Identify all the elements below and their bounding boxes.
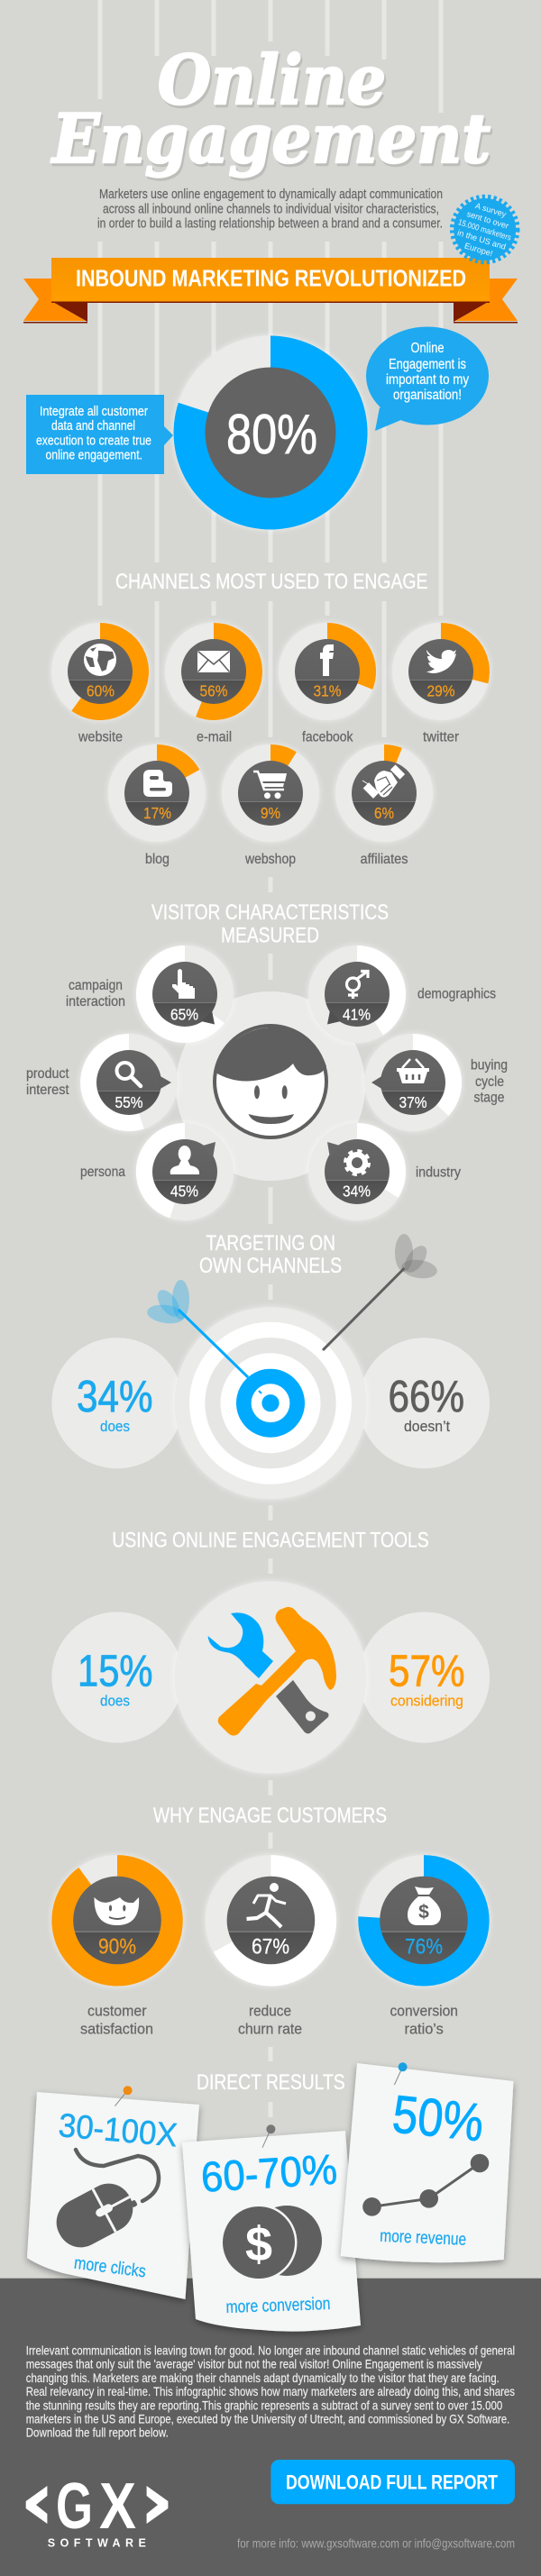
satellite: campaign interaction 65%: interaction: [66, 994, 125, 1009]
donut: reduce churn rate 67%: reduce: [249, 2003, 291, 2020]
stat: 66% doesn't: doesn’t: [404, 1419, 450, 1435]
icon: envelope: [197, 651, 230, 672]
heading: visitor characteristics: VISITOR CHARACTERISTICS: [151, 900, 389, 925]
note: 60-70% more conversion: [182, 2124, 361, 2332]
donut: customer satisfaction 90%: customer: [87, 2003, 147, 2020]
satellite: persona 45%: persona: [80, 1165, 125, 1180]
icon: runner: [247, 1883, 286, 1927]
heading: visitor characteristics: [151, 900, 389, 948]
chart: revenue line: [362, 2154, 489, 2216]
icon: face: [94, 1897, 139, 1925]
stat: 34% does: does: [100, 1419, 130, 1435]
survey starburst badge: sent to over: [465, 209, 509, 231]
channel: twitter 29%: 29%: [427, 682, 455, 700]
satellite: buying cycle stage 37%: [364, 1034, 508, 1131]
icon: basket: [397, 1059, 429, 1083]
satellite: product interest 55%: interest: [26, 1082, 69, 1098]
dart: grey: [323, 1234, 438, 1350]
satellite: industry 34%: [308, 1123, 461, 1220]
icon: money bag: $: [418, 1902, 429, 1923]
intro paragraph: in order to build a lasting relationship between a brand and a consumer.: [97, 216, 443, 231]
donut: customer satisfaction 90%: [51, 1855, 183, 2038]
channel: website 60%: [51, 623, 149, 745]
icon: wrench: [207, 1612, 273, 1678]
download button: [270, 2460, 515, 2504]
satellite: campaign interaction 65%: 65%: [170, 1006, 198, 1024]
stat: 66% doesn't: [359, 1338, 490, 1468]
channel: affiliates 6%: 6%: [374, 804, 394, 822]
icon: money bag: [408, 1886, 441, 1925]
heading: channels: CHANNELS MOST USED TO ENGAGE: [115, 570, 427, 594]
channel: blog 17%: blog: [145, 852, 170, 867]
stat: 57% considering: [359, 1612, 490, 1743]
donut: conversion ratios 76%: conversion: [390, 2003, 458, 2020]
icon: hammer: [218, 1607, 336, 1736]
stat: 34% does: [51, 1338, 183, 1468]
donut chart: 80%: [173, 335, 368, 530]
satellite: buying cycle stage 37%: stage: [474, 1091, 505, 1106]
channel: facebook 31%: 31%: [314, 682, 342, 700]
channel: blog 17%: 17%: [143, 804, 171, 822]
stat: 34% does: 34%: [77, 1373, 153, 1421]
donut: conversion ratios 76%: [358, 1855, 490, 2038]
satellite: industry 34%: industry: [416, 1165, 461, 1181]
survey starburst badge: in the US and: [456, 228, 507, 251]
note: 50% more revenue: 50%: [390, 2084, 487, 2152]
title: Engagement: [50, 99, 491, 178]
channel: webshop 9%: webshop: [244, 852, 296, 867]
dart: blue: [146, 1280, 261, 1393]
visitor characteristics wheel: [26, 945, 508, 1220]
satellite: product interest 55%: 55%: [115, 1093, 143, 1111]
icon: shopping cart: [253, 772, 287, 799]
heading: targeting: TARGETING ON: [206, 1231, 335, 1256]
heading: why engage: WHY ENGAGE CUSTOMERS: [153, 1804, 387, 1828]
logo: GX Software: G: [56, 2471, 93, 2543]
channel: e-mail 56%: 56%: [200, 682, 228, 700]
intro paragraph: [97, 187, 443, 231]
callout: integrate: Integrate all customer: [40, 405, 148, 419]
channel: facebook 31%: facebook: [302, 730, 353, 745]
survey starburst badge: Europe!: [463, 241, 494, 258]
satellite: buying cycle stage 37%: buying: [471, 1058, 508, 1073]
stat: 15% does: 15%: [78, 1648, 153, 1696]
icon: gear: [345, 1151, 369, 1174]
callout: speech bubble: organisation!: [393, 388, 462, 403]
icon: person: [170, 1146, 199, 1174]
channel: affiliates 6%: [335, 744, 433, 867]
logo: GX Software: X: [99, 2471, 136, 2543]
survey starburst badge: [451, 196, 518, 262]
stat: 57% considering: 57%: [389, 1648, 465, 1696]
title: [50, 41, 491, 178]
center backing circle: [176, 991, 365, 1181]
note: 50% more revenue: more revenue: [380, 2226, 467, 2250]
logo: GX Software: [26, 2471, 168, 2550]
satellite: persona 45%: [80, 1123, 234, 1220]
donut: reduce churn rate 67%: churn rate: [238, 2021, 302, 2038]
pin: blue: [394, 2062, 408, 2085]
heading: targeting: [199, 1231, 342, 1278]
pin: orange: [115, 2086, 133, 2106]
note: 30-100X more clicks: [27, 2086, 199, 2299]
icon: twitter bird: [426, 650, 456, 673]
stat: 15% does: [51, 1612, 183, 1743]
icon: coins: $: [245, 2217, 272, 2271]
donut: conversion ratios 76%: ratio’s: [404, 2021, 444, 2038]
note: 50% more revenue: [341, 2062, 514, 2262]
callout: integrate: [26, 395, 173, 474]
satellite: campaign interaction 65%: [66, 945, 234, 1043]
heading: direct results: DIRECT RESULTS: [197, 2070, 345, 2095]
title: Online: [158, 41, 386, 120]
donut: reduce churn rate 67%: [206, 1855, 336, 2038]
stat: 57% considering: considering: [390, 1694, 463, 1710]
channel: webshop 9%: 9%: [261, 804, 280, 822]
note: 60-70% more conversion: 60-70%: [199, 2145, 338, 2201]
callout: integrate: online engagement.: [45, 449, 142, 463]
channel: webshop 9%: [222, 744, 319, 867]
satellite: demographics 41%: [308, 945, 496, 1043]
heading: targeting: OWN CHANNELS: [199, 1254, 342, 1278]
ribbon banner: [23, 258, 518, 323]
channel: twitter 29%: twitter: [423, 730, 460, 745]
target with darts: [146, 1234, 438, 1499]
donut: customer satisfaction 90%: 90%: [98, 1935, 136, 1959]
intro paragraph: across all inbound online channels to individual visitor characteristics,: [103, 202, 439, 216]
satellite: product interest 55%: product: [26, 1066, 69, 1082]
callout: speech bubble: important to my: [386, 372, 469, 388]
note: 60-70% more conversion: more conversion: [225, 2294, 331, 2317]
callout: speech bubble: Engagement is: [389, 357, 466, 372]
satellite: industry 34%: 34%: [343, 1183, 371, 1201]
note: 30-100X more clicks: 30-100X: [57, 2106, 179, 2153]
satellite: persona 45%: 45%: [170, 1183, 198, 1201]
heading: visitor characteristics: MEASURED: [221, 923, 319, 948]
satellite: campaign interaction 65%: campaign: [69, 978, 123, 993]
callout: integrate: data and channel: [51, 419, 135, 434]
heading: tools: USING ONLINE ENGAGEMENT TOOLS: [112, 1529, 429, 1553]
callout: integrate: execution to create true: [36, 434, 151, 449]
stat: 15% does: does: [100, 1694, 130, 1710]
channel: twitter 29%: [392, 623, 490, 745]
channel: website 60%: website: [78, 730, 123, 745]
note: 30-100X more clicks: more clicks: [73, 2253, 147, 2281]
satellite: demographics 41%: 41%: [343, 1006, 371, 1024]
channel: e-mail 56%: [165, 623, 262, 745]
banner heading: INBOUND MARKETING REVOLUTIONIZED: [76, 267, 466, 292]
icon: blogger: [143, 770, 172, 797]
pin: grey: [262, 2124, 275, 2148]
callout: speech bubble: Online: [411, 341, 444, 356]
download button: DOWNLOAD FULL REPORT: [286, 2471, 498, 2494]
tools circle: [175, 1581, 366, 1774]
icon: gender symbol: [346, 972, 368, 999]
channel: website 60%: 60%: [87, 682, 115, 700]
satellite: product interest 55%: [26, 1034, 178, 1131]
donut: customer satisfaction 90%: satisfaction: [80, 2021, 153, 2038]
intro paragraph: Marketers use online engagement to dynamically adapt communication: [99, 187, 443, 202]
satellite: buying cycle stage 37%: 37%: [399, 1093, 427, 1111]
stat: 66% doesn't: 66%: [388, 1373, 464, 1421]
channel: blog 17%: [108, 744, 206, 867]
donut chart: 80%: 80%: [226, 404, 317, 466]
icon: handshake: [362, 764, 405, 799]
callout: speech bubble: [366, 326, 489, 431]
icon: facebook f: [320, 644, 334, 676]
icon: coins: [220, 2205, 322, 2280]
satellite: buying cycle stage 37%: cycle: [475, 1074, 504, 1090]
icon: pointer hand: [172, 969, 195, 999]
icon: hammer claw handle: [276, 1680, 328, 1734]
center smiling face: [215, 1026, 326, 1137]
channel: facebook 31%: [279, 623, 376, 745]
icon: magnifier: [117, 1063, 141, 1086]
channel: e-mail 56%: e-mail: [197, 730, 232, 745]
channel: affiliates 6%: affiliates: [361, 852, 408, 867]
donut: reduce churn rate 67%: 67%: [252, 1935, 289, 1959]
satellite: demographics 41%: demographics: [417, 987, 496, 1002]
footer paragraph: [26, 2343, 515, 2439]
donut: conversion ratios 76%: 76%: [405, 1935, 443, 1959]
icon: computer mouse: [48, 2150, 159, 2255]
footer band: [0, 2279, 541, 2576]
logo: GX Software: SOFTWARE: [48, 2537, 146, 2550]
survey starburst badge: 15.000 marketers: [457, 217, 513, 242]
survey starburst badge: A survey: [474, 201, 508, 219]
footer paragraph: Download the full report below.: [26, 2425, 169, 2439]
icon: globe: [84, 644, 116, 676]
